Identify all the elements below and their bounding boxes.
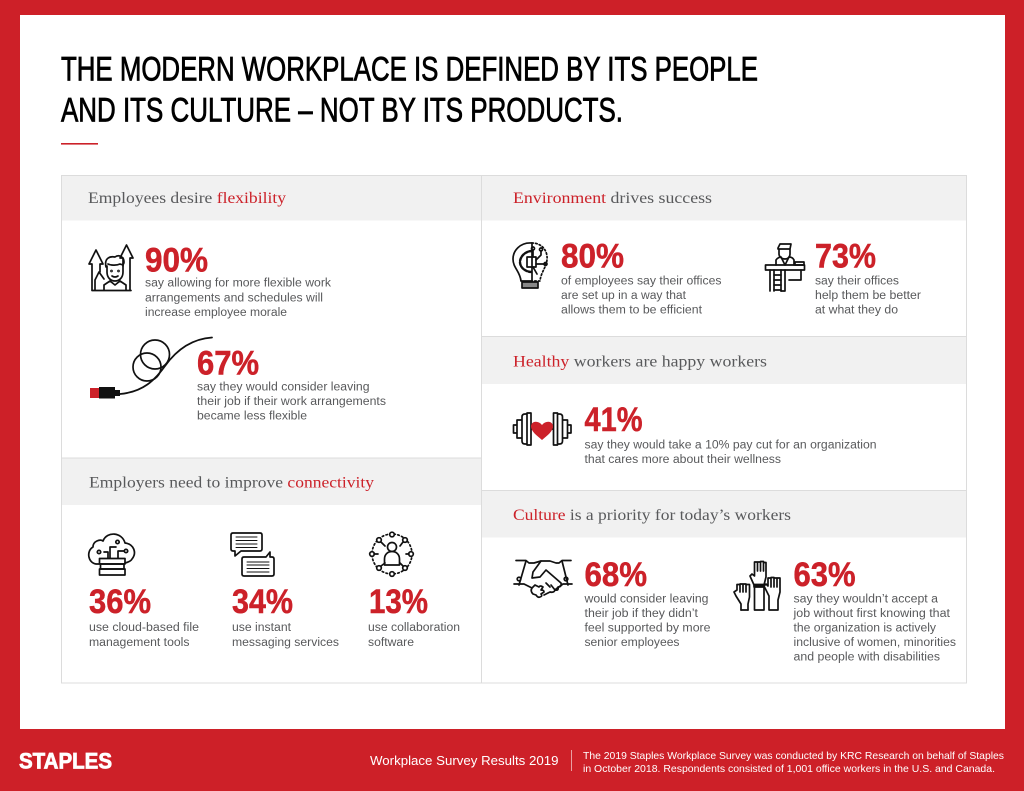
stat: 67%: became less flexible <box>197 411 307 423</box>
stat: 13%: use collaboration <box>368 622 460 634</box>
panel: employers need to improve connectivity <box>89 475 460 649</box>
stat: 34%: 34% <box>232 583 293 621</box>
footer title: Workplace Survey Results 2019 <box>370 753 558 768</box>
stat: 73%: help them be better <box>815 290 921 302</box>
icon: person at desk with ladder <box>766 244 804 291</box>
icon: collaboration network <box>370 532 413 576</box>
stat: 34%: messaging services <box>232 637 339 649</box>
stat: 73%: 73% <box>815 237 876 275</box>
stat: 80%: of employees say their offices <box>561 276 722 288</box>
stat: 90%: arrangements and schedules will <box>145 292 323 304</box>
stat: 68%: would consider leaving <box>583 594 708 606</box>
stat: 68% <box>583 556 710 649</box>
stat: 36%: management tools <box>89 637 190 649</box>
stat: 80%: 80% <box>561 237 624 275</box>
icon: light bulb with gear and circuit <box>513 243 547 288</box>
footer note <box>583 750 1004 775</box>
title: THE MODERN WORKPLACE IS DEFINED BY ITS PEOPLE <box>61 51 758 89</box>
stat: 68%: feel supported by more <box>584 623 710 635</box>
stat: 13%: 13% <box>369 583 428 621</box>
stat: 90%: say allowing for more flexible work <box>145 278 331 290</box>
stat: 73%: at what they do <box>815 304 898 316</box>
stat: 73% <box>815 237 921 316</box>
stat: 63%: and people with disabilities <box>794 652 940 664</box>
stat: 34% <box>232 583 339 649</box>
stat: 41%: 41% <box>584 401 642 439</box>
title accent rule <box>61 143 98 145</box>
stat: 63%: 63% <box>794 556 856 594</box>
panel: environment drives success <box>513 190 921 316</box>
panel: healthy workers are happy workers <box>513 354 876 466</box>
footer note: in October 2018. Respondents consisted of 1,001 office workers in the U.S. and Canada. <box>583 763 995 775</box>
stat: 13% <box>368 583 460 649</box>
stat: 67% <box>197 345 386 423</box>
icon: raised hands <box>734 562 780 610</box>
heading: healthy: Healthy workers are happy workers <box>513 354 767 371</box>
stat: 63% <box>792 556 956 664</box>
stat: 63%: the organization is actively <box>794 623 936 635</box>
logo: Staples: STAPLES <box>19 748 112 774</box>
stat: 63%: job without first knowing that <box>792 608 951 620</box>
heading: environment: Environment drives success <box>513 190 712 207</box>
title: AND ITS CULTURE – NOT BY ITS PRODUCTS. <box>61 92 623 130</box>
icon: handshake <box>514 560 572 597</box>
stat: 68%: their job if they didn’t <box>584 608 699 620</box>
stat: 80% <box>561 237 722 316</box>
stat: 90%: 90% <box>145 242 208 280</box>
icon: dumbbell with heart <box>514 413 571 445</box>
stat: 90%: increase employee morale <box>145 307 287 319</box>
stat: 63%: say they wouldn’t accept a <box>794 594 939 606</box>
heading: culture: Culture is a priority for today’s workers <box>513 507 791 524</box>
panel: culture is a priority <box>513 507 956 664</box>
stat: 80%: allows them to be efficient <box>561 304 703 316</box>
stat: 36%: 36% <box>89 583 151 621</box>
stat: 73%: say their offices <box>815 276 899 288</box>
panel: survey table <box>62 175 966 683</box>
stat: 36%: use cloud-based file <box>89 622 199 634</box>
footer <box>19 748 1004 775</box>
stat: 90% <box>145 242 331 319</box>
icon: cloud with servers <box>89 534 134 575</box>
heading: flexibility: Employees desire flexibility <box>88 190 286 207</box>
stat: 41% <box>584 401 876 466</box>
heading: connectivity: Employers need to improve connectivity <box>89 475 374 492</box>
title <box>61 51 758 130</box>
stat: 67%: say they would consider leaving <box>197 382 370 394</box>
icon: person with rising arrows <box>89 245 133 290</box>
stat: 41%: that cares more about their wellness <box>584 454 781 466</box>
stat: 68%: 68% <box>584 556 647 594</box>
stat: 67%: their job if their work arrangements <box>197 396 386 408</box>
stat: 63%: inclusive of women, minorities <box>794 637 956 649</box>
icon: coiled cable with plug <box>90 338 212 398</box>
stat: 67%: 67% <box>197 345 259 383</box>
icon: chat bubbles <box>231 533 274 576</box>
stat: 13%: software <box>368 637 414 649</box>
footer note: The 2019 Staples Workplace Survey was conducted by KRC Research on behalf of Staples <box>583 750 1004 762</box>
panel: employees desire flexibility <box>88 190 386 423</box>
stat: 34%: use instant <box>232 622 292 634</box>
stat: 41%: say they would take a 10% pay cut for an organization <box>584 440 876 452</box>
stat: 36% <box>89 583 199 649</box>
stat: 68%: senior employees <box>584 637 680 649</box>
stat: 80%: are set up in a way that <box>561 290 687 302</box>
